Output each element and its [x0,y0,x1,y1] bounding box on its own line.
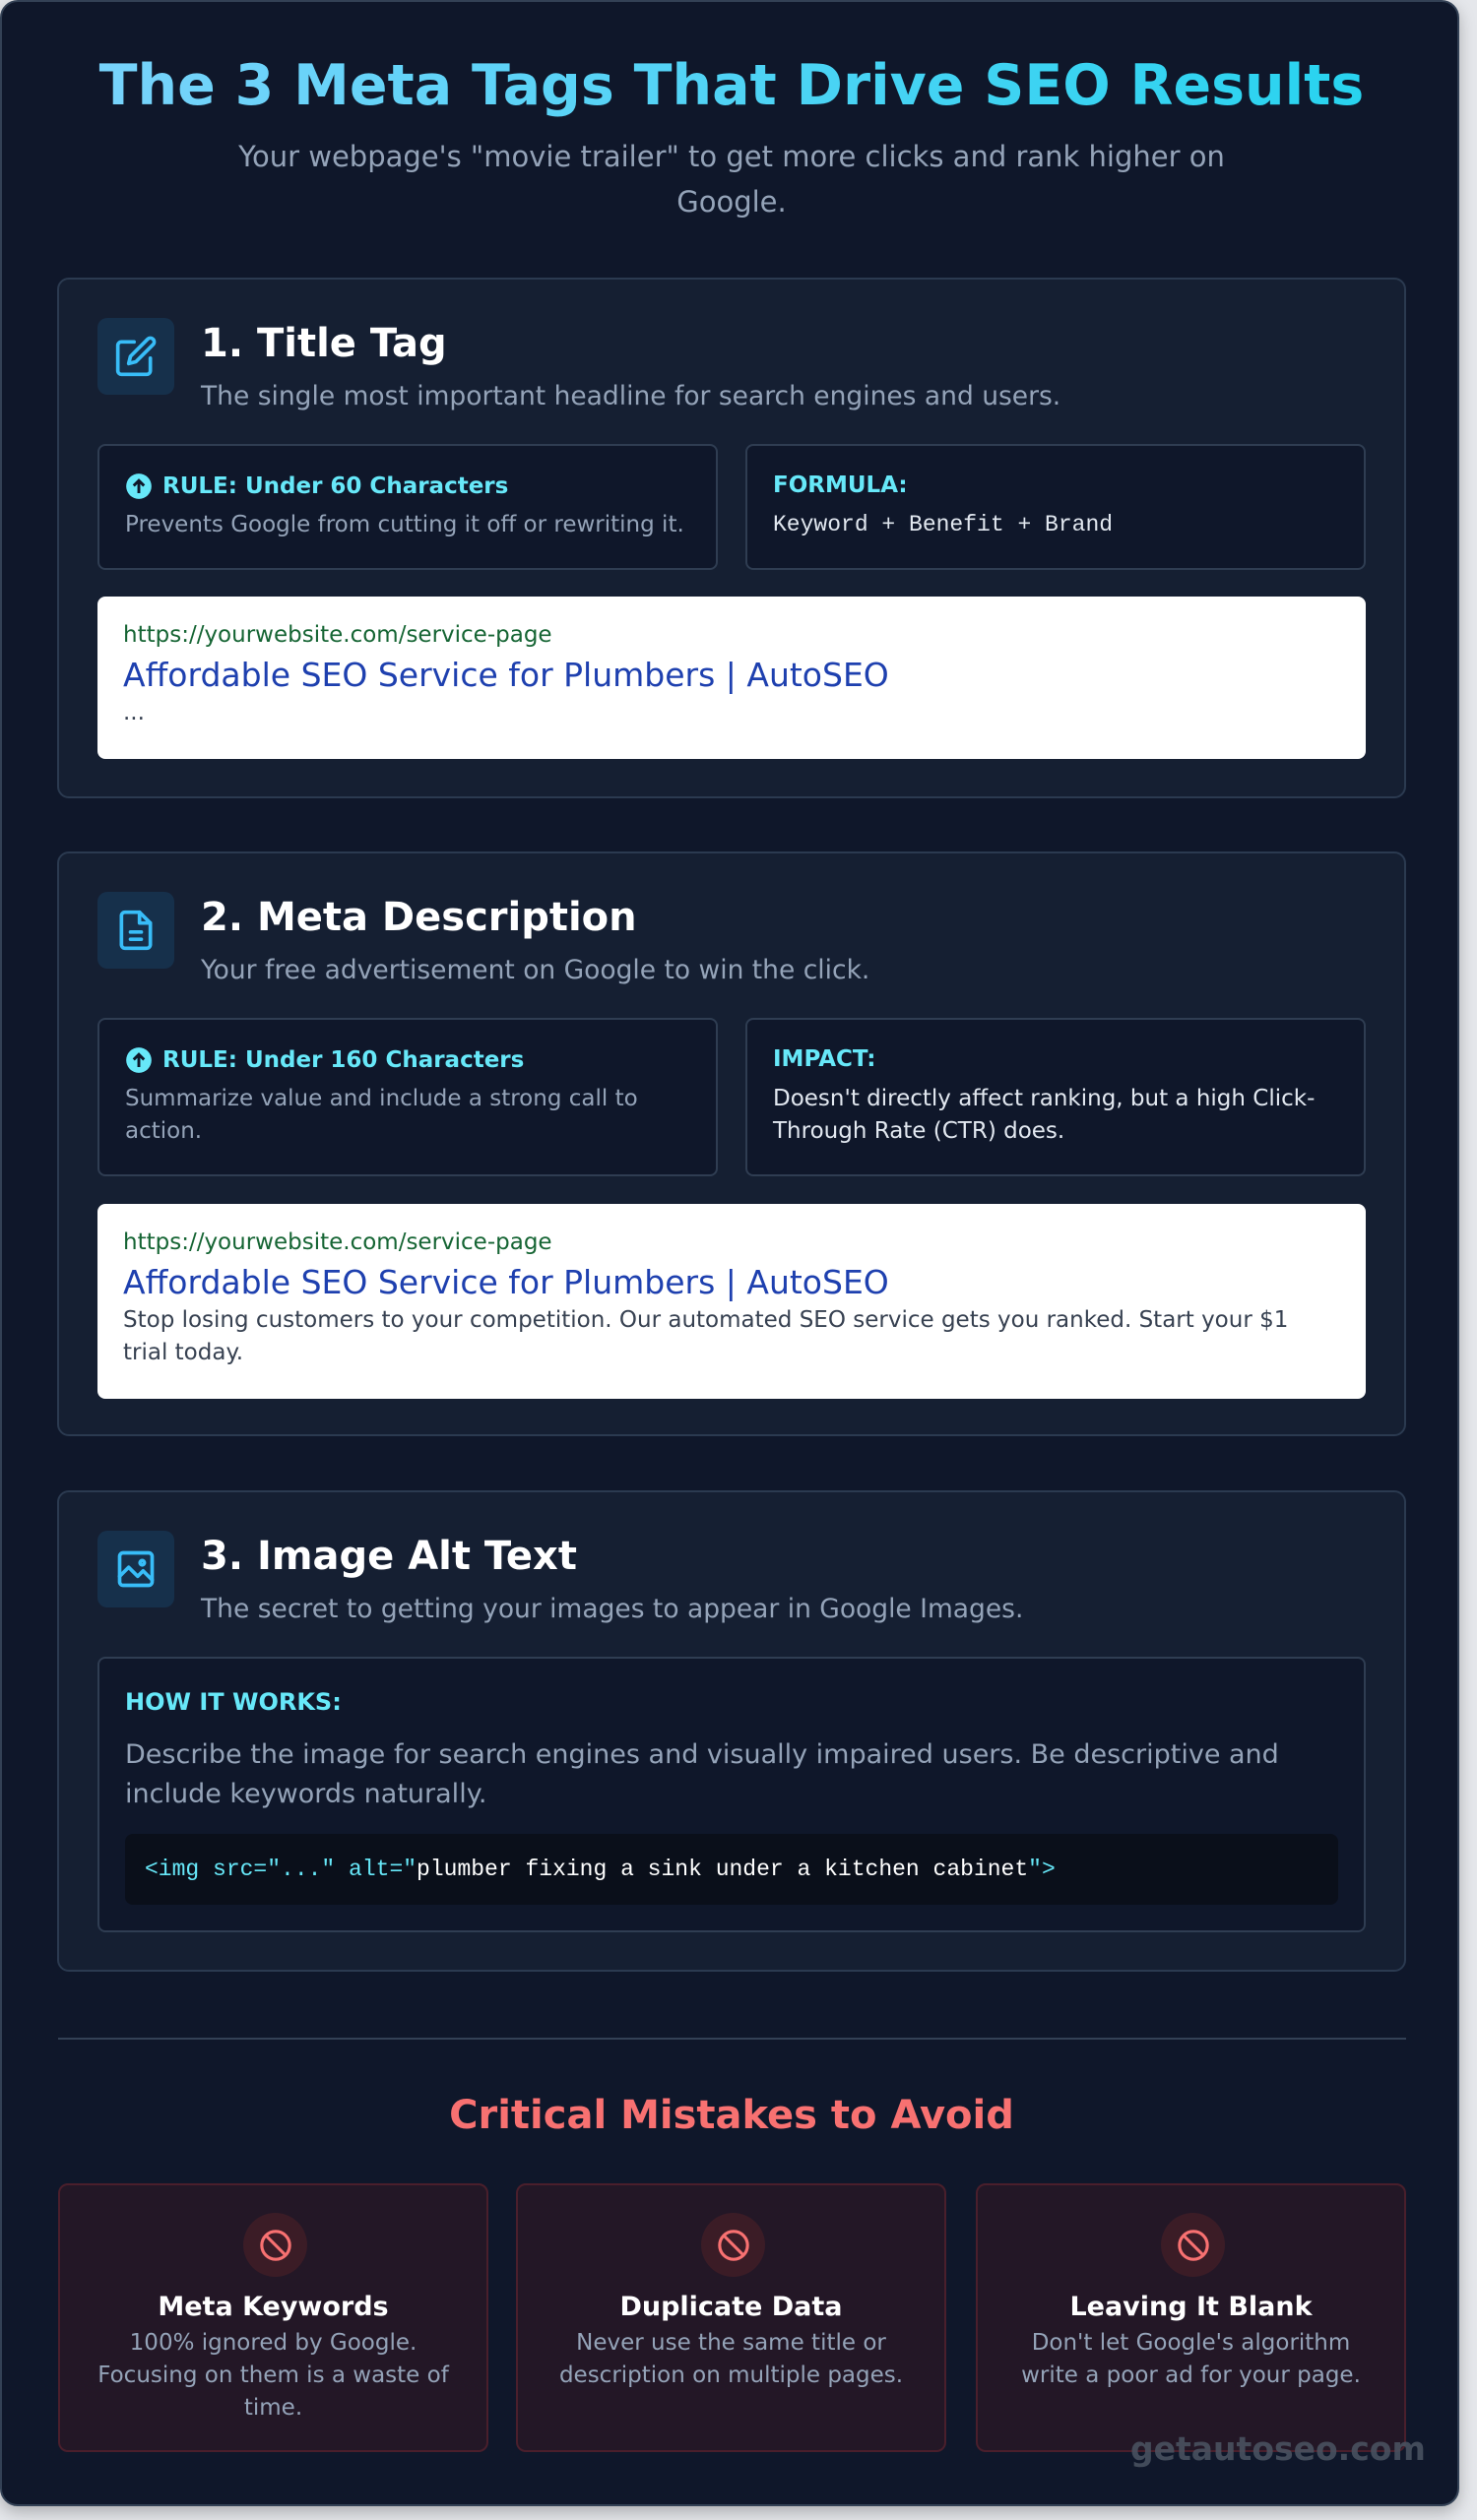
panel: image alt text [57,1490,1406,1972]
icon: document [97,892,174,969]
search preview [97,1204,1366,1399]
panel: meta description [57,851,1406,1436]
formula box: FORMULA: [773,472,908,498]
icon: edit [97,318,174,395]
search preview: https://yourwebsite.com/service-page [123,1229,552,1255]
mistake card: leaving it blank: Leaving It Blank [1069,2292,1313,2322]
mistake card: duplicate data: Duplicate Data [619,2292,843,2322]
mistake card: duplicate data: Never use the same title or description on multiple pages. [559,2330,903,2388]
rule box [97,444,718,570]
search preview: ... [123,700,145,725]
impact box: IMPACT: [773,1046,876,1072]
mistakes heading: Critical Mistakes to Avoid [449,2093,1014,2138]
search preview: https://yourwebsite.com/service-page [123,622,552,648]
heading: 3. Image Alt Text [201,1534,577,1579]
code snippet: <img src="..." alt="plumber fixing a sink under a kitchen cabinet"> [145,1857,1056,1882]
how it works box [97,1657,1366,1932]
panel: title tag [57,278,1406,798]
how it works box: Describe the image for search engines and visually impaired users. Be descriptive and include keywords naturally. [125,1739,1279,1809]
rule box: RULE: Under 160 Characters [162,1047,524,1073]
how it works box: HOW IT WORKS: [125,1688,342,1716]
search preview: Affordable SEO Service for Plumbers | AutoSEO [123,656,889,694]
impact box [745,1018,1366,1176]
mistake card: meta keywords: Meta Keywords [158,2292,389,2322]
rule box: Prevents Google from cutting it off or rewriting it. [125,512,684,537]
mistake card: leaving it blank: Don't let Google's algorithm write a poor ad for your page. [1021,2330,1361,2388]
description: The secret to getting your images to appear in Google Images. [201,1594,1023,1624]
impact box: Doesn't directly affect ranking, but a high Click-Through Rate (CTR) does. [773,1086,1315,1144]
search preview [97,597,1366,759]
rule box: Summarize value and include a strong call to action. [125,1086,638,1144]
rule box [97,1018,718,1176]
description: The single most important headline for search engines and users. [201,381,1060,411]
heading: 2. Meta Description [201,895,637,940]
formula box: Keyword + Benefit + Brand [773,512,1113,537]
title: The 3 Meta Tags That Drive SEO Results [99,53,1364,118]
code snippet [125,1834,1338,1905]
heading: 1. Title Tag [201,321,447,366]
formula box [745,444,1366,570]
search preview: Affordable SEO Service for Plumbers | AutoSEO [123,1263,889,1301]
rule label: RULE: Under 60 Characters [162,473,508,499]
mistake card: meta keywords: 100% ignored by Google. Focusing on them is a waste of time. [97,2330,449,2421]
description: Your free advertisement on Google to win the click. [201,955,869,985]
icon: image [97,1531,174,1607]
mistake card: leaving it blank [976,2183,1406,2452]
subtitle: Your webpage's "movie trailer" to get more clicks and rank higher on Google. [238,140,1225,219]
mistake card: duplicate data [516,2183,946,2452]
mistake card: meta keywords [58,2183,488,2452]
search preview: Stop losing customers to your competition. Our automated SEO service gets you ranked. Start your $1 trial today. [123,1307,1288,1365]
watermark: getautoseo.com [1130,2429,1426,2468]
